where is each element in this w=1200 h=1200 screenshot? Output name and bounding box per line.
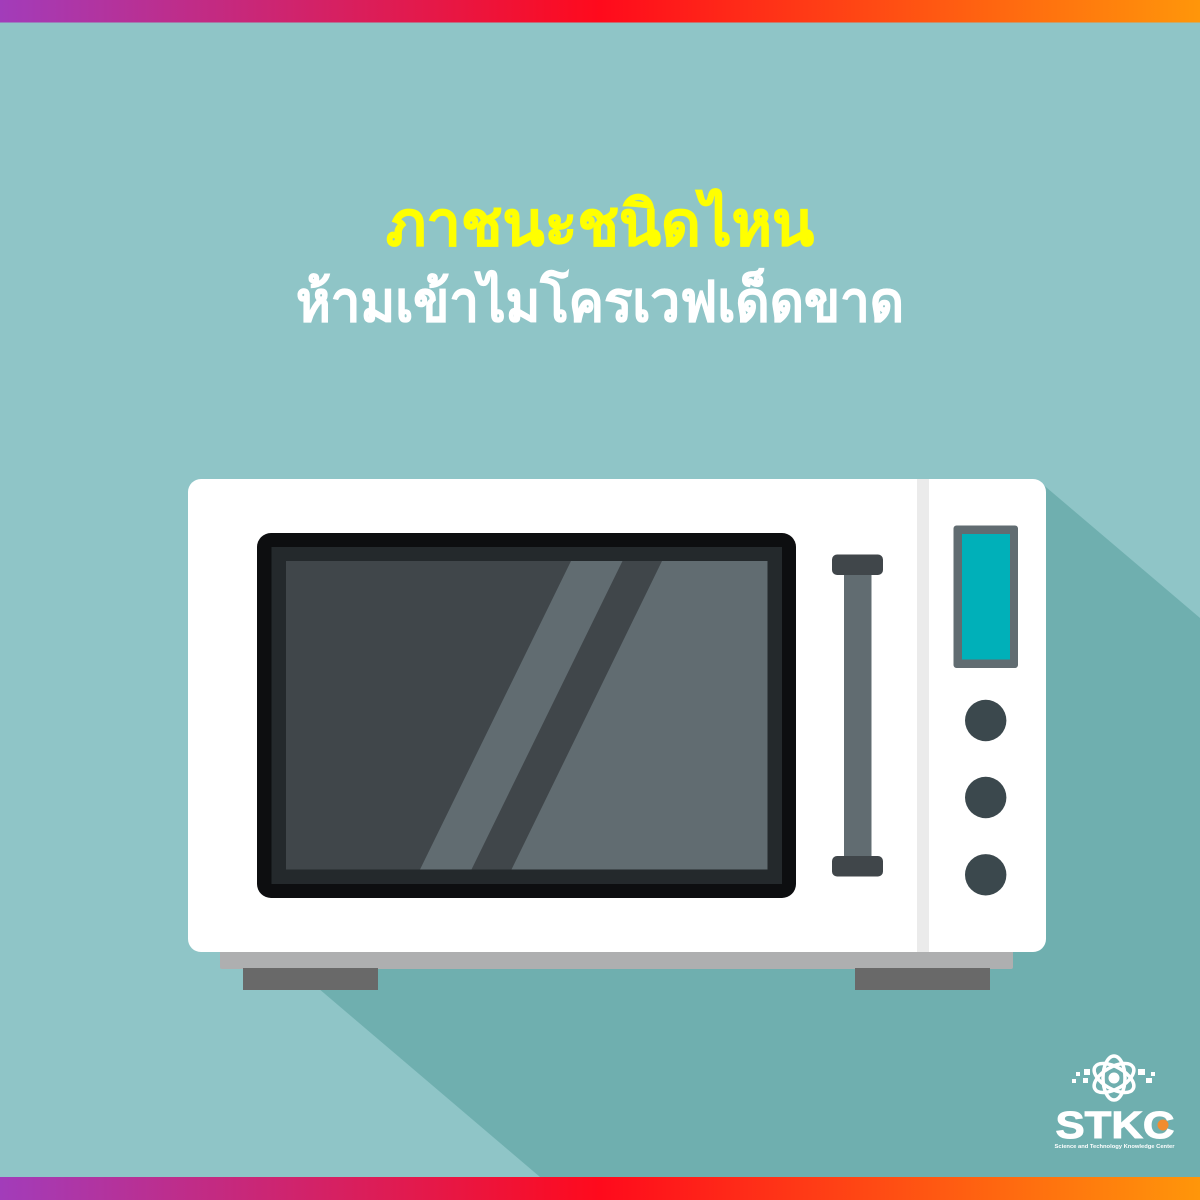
logo pixels right bbox=[1138, 1069, 1155, 1083]
body bbox=[188, 479, 1046, 952]
STKC logo bbox=[1054, 1056, 1175, 1150]
handle bbox=[832, 554, 883, 876]
handle bar bbox=[844, 570, 872, 862]
knob 1 bbox=[965, 700, 1006, 741]
base strip bbox=[220, 950, 1013, 969]
panel divider bbox=[917, 479, 929, 952]
door glass bbox=[286, 561, 768, 870]
top gradient band bbox=[0, 0, 1200, 22]
door inner frame bbox=[272, 547, 782, 884]
logo wordmark: STKC bbox=[1056, 1105, 1174, 1147]
left foot bbox=[243, 968, 378, 990]
title bbox=[296, 188, 904, 333]
knob 3 bbox=[965, 854, 1006, 896]
logo tagline: Science and Technology Knowledge Center bbox=[1054, 1144, 1175, 1150]
display frame bbox=[954, 526, 1018, 668]
title line 1: ภาชนะชนิดไหน bbox=[386, 188, 814, 259]
glass reflection right bbox=[512, 561, 768, 870]
handle bottom cap bbox=[832, 856, 883, 876]
display bbox=[954, 526, 1018, 668]
knob 2 bbox=[965, 777, 1006, 818]
handle top cap bbox=[832, 554, 883, 575]
logo atom icon bbox=[1089, 1056, 1139, 1100]
microwave bbox=[188, 479, 1046, 990]
right foot bbox=[855, 968, 990, 990]
bottom gradient band bbox=[0, 1177, 1200, 1200]
long shadow of microwave bbox=[318, 482, 1200, 1177]
glass reflection stripe bbox=[420, 561, 622, 870]
display screen bbox=[962, 534, 1010, 660]
door frame bbox=[257, 533, 796, 898]
logo pixels left bbox=[1072, 1069, 1090, 1083]
title line 2: ห้ามเข้าไมโครเวฟเด็ดขาด bbox=[296, 267, 904, 333]
logo orange dot bbox=[1158, 1120, 1168, 1130]
